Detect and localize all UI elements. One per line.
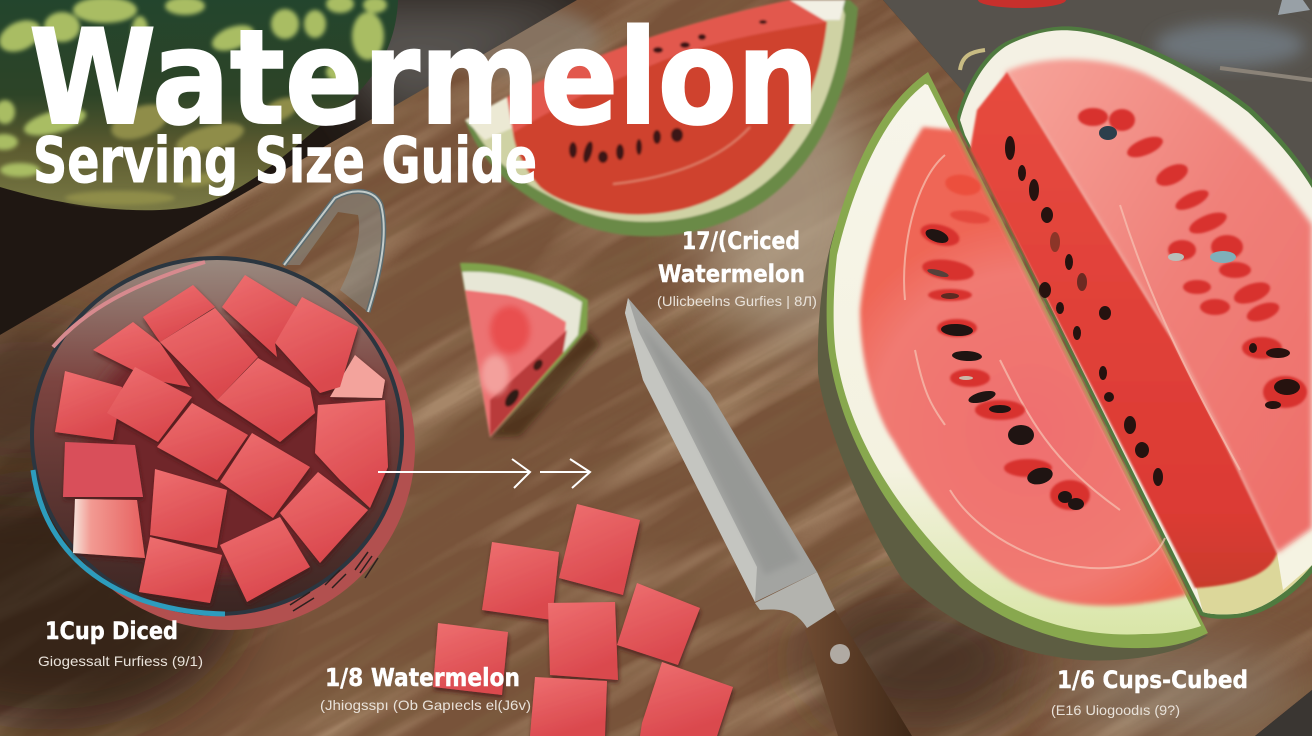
label: 1 cup diced <box>38 617 203 669</box>
large watermelon half, left wedge <box>818 72 1208 661</box>
stick on table <box>1220 68 1312 80</box>
cup body <box>43 264 415 630</box>
seeds on left wedge <box>924 226 1084 510</box>
seeds on right wedge <box>1005 126 1300 486</box>
left wedge flesh <box>860 127 1187 606</box>
arrow 2 <box>540 459 590 488</box>
label: 1/6 cups cubed <box>1051 666 1248 718</box>
stem <box>960 50 985 70</box>
large watermelon half, right wedge <box>957 26 1312 619</box>
table upper right <box>883 0 1312 610</box>
label: sliced watermelon: 17/(Criced <box>682 227 800 255</box>
cup measure marks <box>290 552 378 611</box>
melon side <box>818 230 1208 661</box>
pale vein <box>1120 205 1240 470</box>
table upper middle <box>300 0 620 140</box>
right wedge red cut face <box>970 72 1277 588</box>
red object at the top edge <box>978 0 1066 8</box>
red seed pockets <box>1078 108 1307 408</box>
red seed pockets <box>918 172 1090 510</box>
diced watermelon in cup <box>55 275 388 603</box>
knife handle <box>805 610 912 736</box>
label: 1/6 cups cubed: (E16 Uiogoodıs (9?) <box>1051 702 1180 718</box>
label: sliced watermelon: (Ulicbeelns Gurfies | 8Л) <box>657 293 817 309</box>
label: 1 cup diced: Giogessalt Furfiess (9/1) <box>38 653 203 669</box>
whole watermelon, top left <box>0 0 398 210</box>
cup rim <box>32 258 402 614</box>
measuring cup handle <box>284 191 384 312</box>
left wedge green rind <box>827 72 1208 648</box>
label: 1/8 watermelon: 1/8 Watermelon <box>325 663 520 692</box>
diced watermelon on board <box>433 504 733 736</box>
knife guard <box>755 572 835 628</box>
blue grey patch on table <box>1155 23 1305 67</box>
knife blade <box>625 298 817 602</box>
arrow 1 <box>378 459 530 488</box>
label: 1/8 watermelon <box>320 663 531 713</box>
pale veins <box>904 155 1165 568</box>
scrap on table <box>1278 0 1310 15</box>
label: sliced watermelon <box>657 227 817 309</box>
title: Watermelon <box>29 1 819 154</box>
knife rivet <box>830 644 850 664</box>
right wedge pink flesh <box>1005 59 1312 553</box>
label: sliced watermelon: Watermelon <box>658 260 805 288</box>
cup interior <box>32 258 402 614</box>
board lower right corner shadow <box>1255 690 1312 736</box>
label: 1 cup diced: 1Cup Diced <box>45 617 178 645</box>
small triangular watermelon wedge <box>460 263 600 437</box>
measuring cup <box>32 258 415 630</box>
label: 1/8 watermelon: (Jhiogsspı (Ob Gapıecls el(J6v) <box>320 697 531 713</box>
blue rim highlight <box>33 470 225 614</box>
top watermelon slice <box>465 0 858 236</box>
knife <box>625 298 912 736</box>
subtitle: Serving Size Guide <box>33 124 537 197</box>
label: 1/6 cups cubed: 1/6 Cups-Cubed <box>1057 666 1248 694</box>
left wedge white rind <box>834 84 1201 635</box>
pink spout <box>53 262 205 347</box>
